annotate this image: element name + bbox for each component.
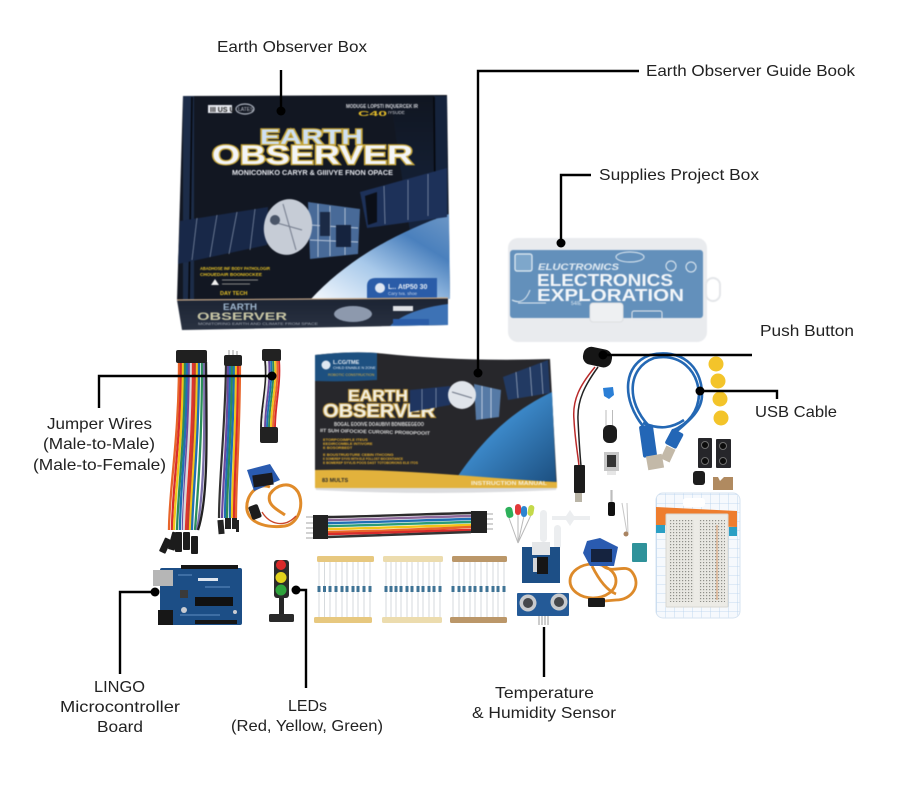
small servo motor with wires <box>247 464 301 527</box>
photoresistor <box>622 503 628 533</box>
box title: EARTH <box>260 126 363 149</box>
label: USB Cable: USB Cable <box>755 404 837 421</box>
horizontal jumper wires <box>306 511 493 539</box>
label: LEDs: (Red, Yellow, Green) <box>231 718 383 735</box>
box title: OBSERVER <box>212 140 413 170</box>
book subtitle: IIT SUH OIFOCIOE CUROIRC PROIIOPOOIT <box>320 428 430 437</box>
book strip text: INSTRUCTION MANUAL <box>471 481 548 487</box>
box lower-left notes <box>200 266 271 297</box>
arrow: LEDs <box>292 586 306 688</box>
label: temperature and humidity sensor: & Humidity Sensor <box>472 705 617 722</box>
book yellow strip <box>315 470 557 488</box>
book yellow list: E BOSORBEDT <box>323 445 353 450</box>
guide book <box>315 352 557 493</box>
book blue header: CHILD ENABLE N 2ONE <box>333 366 376 370</box>
project box clasp <box>590 303 623 322</box>
label: jumper wires: (Male-to-Female) <box>33 457 166 474</box>
label: jumper wires: (Male-to-Male) <box>43 436 155 453</box>
book yellow list: E BOUSTRUDTURE CEBIN ITHCONG <box>323 452 393 457</box>
seven-segment display <box>604 452 619 475</box>
arrow: supplies project box <box>556 175 591 248</box>
box right solar panel <box>360 168 447 228</box>
project box label panel: EXPLORATION <box>537 285 684 305</box>
book satellite <box>410 360 550 420</box>
book earth <box>458 392 556 482</box>
second servo motor with wires <box>570 538 636 607</box>
tactile push button modules <box>693 438 733 490</box>
book blue header <box>315 352 377 381</box>
box logos: III US U <box>210 107 235 114</box>
loose LEDs <box>505 504 535 543</box>
medium jumper wire bundle <box>217 350 242 534</box>
label: Earth Observer Box: Earth Observer Box <box>217 39 367 56</box>
book yellow list: ETORPCOIMPLE ITEUS <box>323 437 368 442</box>
project box label panel: 54IE <box>571 301 582 307</box>
resistor set one <box>314 556 374 623</box>
box satellite <box>259 195 360 259</box>
label: temperature and humidity sensor: Temperature <box>495 685 594 702</box>
book strip text <box>322 478 548 487</box>
book title: EARTH <box>348 388 408 405</box>
box title <box>212 126 413 170</box>
photoresistor head <box>624 532 628 536</box>
book yellow list: E BOMEREP SYVLIS POOS DAST TOTOBORIONS ELE ITOS <box>323 460 418 465</box>
box logos: IYSUDE <box>388 110 405 115</box>
label: Earth Observer Guide Book: Earth Observer Guide Book <box>646 63 856 80</box>
book yellow list <box>323 437 418 465</box>
arrow: Earth Observer box <box>276 70 286 116</box>
box lower-left notes: ABADHOSE INF BODY PATHOLOGIR <box>200 266 271 271</box>
box blue badge: Cary tva. shoe <box>388 291 418 296</box>
arrow: push button <box>598 350 752 360</box>
book strip text: 83 MULTS <box>322 478 349 484</box>
label: Supplies Project Box: Supplies Project Box <box>599 167 759 184</box>
black capacitor <box>608 490 615 516</box>
label: Push Button: Push Button <box>760 323 854 340</box>
project box label panel: ELECTRONICS <box>537 270 673 290</box>
book subtitle <box>320 422 430 437</box>
temperature and humidity sensor <box>632 543 647 562</box>
label: temperature and humidity sensor <box>472 685 617 722</box>
box logos <box>208 104 418 118</box>
box front lip <box>177 298 448 330</box>
label: LINGO microcontroller board: LINGO <box>94 679 145 696</box>
USB cable <box>628 353 702 470</box>
small blue trimmer <box>603 387 614 399</box>
blue module board <box>522 542 560 583</box>
box front lip: EARTH <box>223 302 257 312</box>
project box label panel <box>510 250 703 318</box>
white servo horns <box>540 510 590 549</box>
breadboard <box>666 514 728 607</box>
box logos: C40 <box>358 109 387 118</box>
traffic light LED module <box>269 560 294 622</box>
yellow button caps <box>708 356 728 426</box>
breadboard package <box>656 493 740 618</box>
arrow: USB cable <box>696 386 777 399</box>
project box hanging tab <box>706 278 720 301</box>
book yellow list: E SOMEREP SYVIS WITH ELE FOLLOST BIOCENTIANCE <box>323 456 403 461</box>
label: LEDs <box>231 698 383 735</box>
label: LEDs: LEDs <box>288 698 327 715</box>
ultrasonic sensor <box>517 593 569 625</box>
project box label panel: ELUCTRONICS <box>538 262 620 273</box>
arrow: microcontroller board <box>120 588 160 674</box>
arrow: guide book <box>474 71 639 378</box>
label: LINGO microcontroller board: Board <box>97 719 143 736</box>
box blue badge <box>367 278 437 298</box>
box lower-left notes: CHOUEDAIR BOONIOCKEE <box>200 272 262 277</box>
Earth Observer box <box>177 95 450 330</box>
arrow: temperature sensor <box>543 627 545 677</box>
box logos: LATES <box>238 107 254 113</box>
label: LINGO microcontroller board <box>60 679 181 736</box>
book blue header: L.CG/TME <box>333 360 360 366</box>
book yellow list: EEDIRCOMBLE INTIVORE <box>323 441 373 446</box>
book title <box>323 388 435 421</box>
box earth horizon <box>311 214 450 299</box>
book blue header: ROBOTIC CONSTRUCTION <box>328 373 375 377</box>
LINGO microcontroller board <box>153 565 242 625</box>
box front lip: MONITORING EARTH AND CLIMATE FROM SPACE <box>198 322 319 326</box>
buzzer <box>603 410 617 443</box>
short jumper wire bundle <box>260 349 281 443</box>
box tagline: MONICONIKO CARYR & GIIIVYE FNON OPACE <box>232 168 393 177</box>
box left solar panel <box>178 207 268 264</box>
long jumper wire bundle <box>159 350 207 554</box>
box logos: MODUGE LOPSTI INQUERCEK IR <box>346 104 418 110</box>
resistor set three <box>450 556 507 623</box>
book subtitle: BOGAL EOOIVE DOAUBIVI BDNIBEEGEOO <box>334 422 424 428</box>
label: LINGO microcontroller board: Microcontroller <box>60 699 181 716</box>
label: jumper wires <box>33 416 166 474</box>
resistor set two <box>382 556 443 623</box>
book title: OBSERVER <box>323 401 435 421</box>
box lower-left notes: DAY TECH <box>220 291 248 297</box>
battery clip with barrel plug <box>574 345 614 502</box>
label: jumper wires: Jumper Wires <box>47 416 152 433</box>
supplies project box <box>508 238 720 342</box>
box front lip: OBSERVER <box>197 311 287 323</box>
box blue badge: L.. AtP50 30 <box>388 284 428 291</box>
arrow: jumper wires <box>99 372 276 408</box>
